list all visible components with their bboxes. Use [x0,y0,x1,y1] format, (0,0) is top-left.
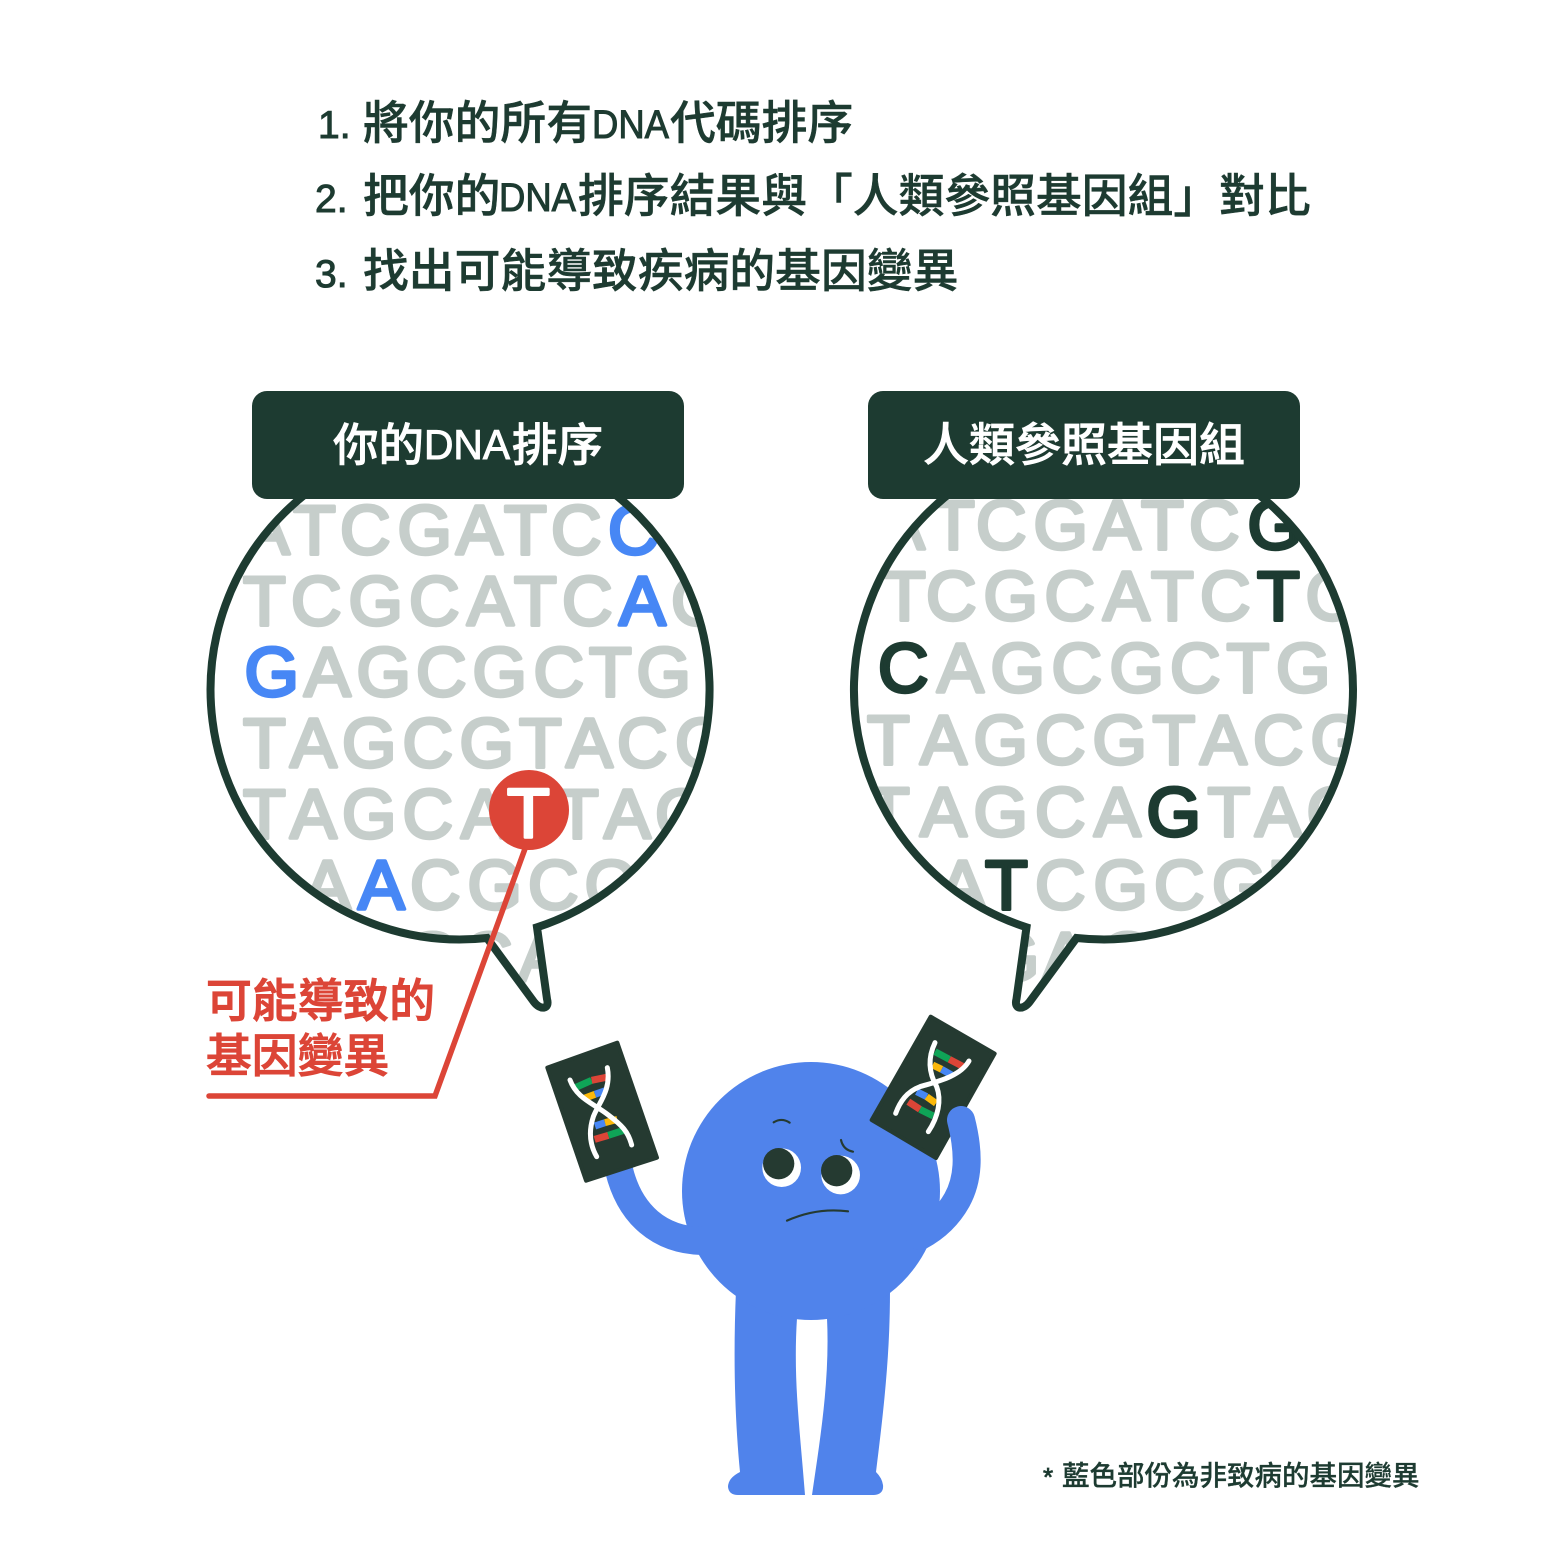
bubble outline [211,440,710,1008]
step 2: 排序結果與「人類參照基因組」對比 [578,171,1311,222]
sequence letters right: GAG [985,918,1154,996]
step 3: 3. [315,253,348,296]
sequence letters right: T [1257,557,1300,635]
callout label: 可能導致的 [206,976,435,1027]
callout: disease-causing variant [206,770,569,1096]
sequence letters right: G [1248,486,1302,564]
heading: your DNA sequence: DNA [424,421,510,468]
head and body [682,1062,940,1320]
panel: your DNA sequence bubble [206,499,714,1012]
heading: human reference genome: 人類參照基因組 [923,419,1245,471]
step 1: 1. [318,104,351,147]
left DNA card [547,1043,657,1181]
sequence letters left: A [619,562,666,640]
footnote: 藍色部份為非致病的基因變異 [1062,1460,1420,1491]
sequence letters right: C [1306,557,1356,635]
heading: your DNA sequence: 排序 [512,420,603,471]
legs [728,1290,890,1495]
heading: your DNA sequence [252,391,684,499]
sequence letters right: G [1146,773,1201,851]
heading: human reference genome [868,391,1300,499]
step 2: DNA [499,176,576,220]
sequence letters left: ATCGATC [243,491,602,569]
sequence letters left: AGCGCTG [304,633,691,711]
step 2: 2. [315,178,348,221]
sequence letters right: ATCGATC [878,486,1240,564]
sequence letters right: A [939,846,986,924]
heading: your DNA sequence: 你的 [333,420,424,471]
character: blue figure holding DNA cards [547,1017,995,1495]
sequence letters left: C [608,491,659,569]
step 1: DNA [592,103,669,147]
left arm [619,1170,702,1241]
right DNA card [872,1017,995,1158]
sequence letters right: TAGCA [867,773,1141,851]
face [762,1120,860,1221]
step 1: 將你的所有 [363,98,592,149]
sequence letters left: G [244,633,299,711]
title: numbered steps [315,98,1311,297]
sequence letters right: TCGCATC [883,557,1251,635]
leader line [209,846,526,1096]
sequence letters right: C [878,629,929,707]
sequence letters right: TAGCGTACG [867,701,1365,779]
bubble fill [211,440,710,1008]
sequence letters right [867,486,1365,996]
step 1: 代碼排序 [670,98,853,149]
step 1 [318,98,853,149]
panel: human reference genome bubble [850,499,1357,1012]
footnote: * [1043,1462,1053,1492]
sequence letters right: AGCGCTG [937,629,1330,707]
sequence letters left [243,491,726,996]
sequence letters left: TAGCATAC [243,775,706,853]
sequence letters right: CGCGT [1035,846,1314,924]
bubble fill [854,440,1353,1008]
sequence letters left: A [358,846,405,924]
callout label: 基因變異 [206,1031,389,1082]
sequence letters right: TAC [1208,773,1357,851]
sequence letters left: CGCC [410,846,635,924]
right arm [920,1120,967,1236]
sequence letters left: GCA [405,918,565,996]
step 3: 找出可能導致疾病的基因變異 [363,246,958,297]
red T marker [489,770,569,852]
sequence letters left: A [304,846,351,924]
sequence letters left: C [671,562,722,640]
callout label [206,976,435,1082]
red T marker: T [507,774,550,852]
sequence letters left: TCGCATC [243,562,613,640]
sequence letters left: TAGCGTACC [243,704,726,782]
bubble outline [854,440,1353,1008]
sequence letters right: T [985,846,1028,924]
step 2: 把你的 [363,171,500,222]
